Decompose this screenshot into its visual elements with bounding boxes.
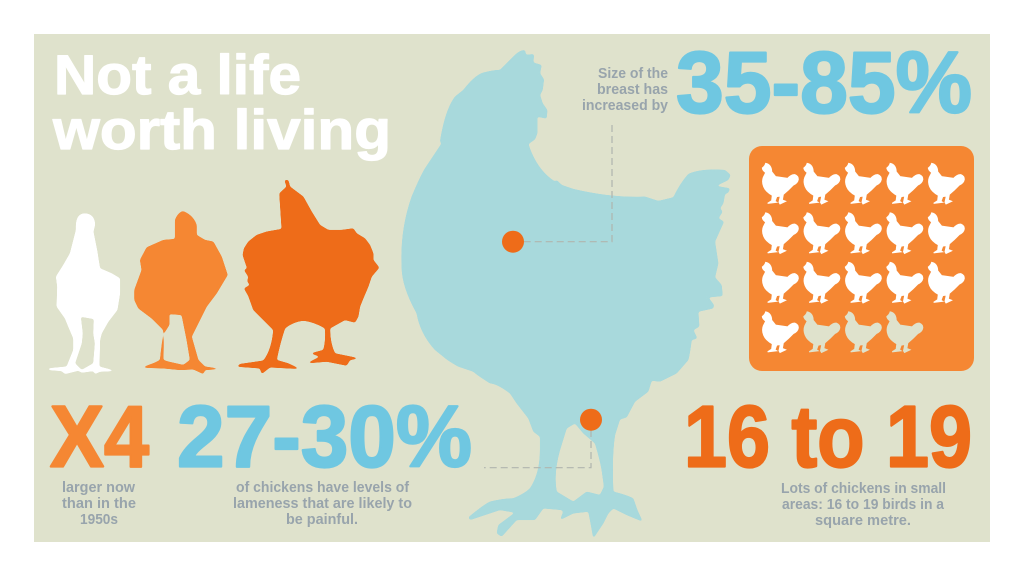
title: worth living xyxy=(52,98,391,161)
text: breast size caption: Size of the xyxy=(598,66,668,82)
illustration: large chicken silhouette xyxy=(401,50,731,538)
text: X4 caption: larger now xyxy=(62,480,136,496)
panel: chicken density grid xyxy=(749,146,974,371)
text: lameness caption xyxy=(233,480,412,528)
illustration: three chickens growing in size xyxy=(48,180,379,374)
icons: row 3 xyxy=(762,262,964,303)
text: X4 caption xyxy=(62,480,136,528)
stat: 35-85%: 35-85% xyxy=(676,34,972,132)
marker: breast dot xyxy=(502,231,524,253)
connector: leg callout xyxy=(484,430,591,468)
text: X4 caption: 1950s xyxy=(80,512,118,528)
icons: row 2 xyxy=(762,213,964,253)
text: density caption: areas: 16 to 19 birds in a xyxy=(782,497,945,513)
title: Not a life xyxy=(54,43,301,106)
icons: row 1 xyxy=(762,163,964,204)
text: breast size caption: breast has xyxy=(597,82,668,98)
text: X4 caption: than in the xyxy=(62,496,136,512)
text: lameness caption: of chickens have levels of xyxy=(236,480,409,496)
text: density caption: Lots of chickens in small xyxy=(781,481,946,497)
text: density caption xyxy=(781,481,946,529)
stat: X4: X4 xyxy=(50,388,149,486)
marker: leg dot xyxy=(580,409,602,431)
text: breast size caption xyxy=(582,66,668,114)
text: density caption: square metre. xyxy=(815,513,911,529)
title xyxy=(52,43,391,161)
text: lameness caption: lameness that are likely to xyxy=(233,496,412,512)
text: lameness caption: be painful. xyxy=(286,512,358,528)
text: breast size caption: increased by xyxy=(582,98,668,114)
stat: 27-30%: 27-30% xyxy=(177,388,472,486)
icons: row 4 xyxy=(762,312,923,352)
connector: breast callout xyxy=(524,125,612,242)
icon: white 1950s chicken xyxy=(48,213,120,374)
stat: 16 to 19: 16 to 19 xyxy=(684,388,972,486)
icon: large dark orange chicken xyxy=(237,180,379,374)
icon: medium orange chicken xyxy=(134,211,228,374)
